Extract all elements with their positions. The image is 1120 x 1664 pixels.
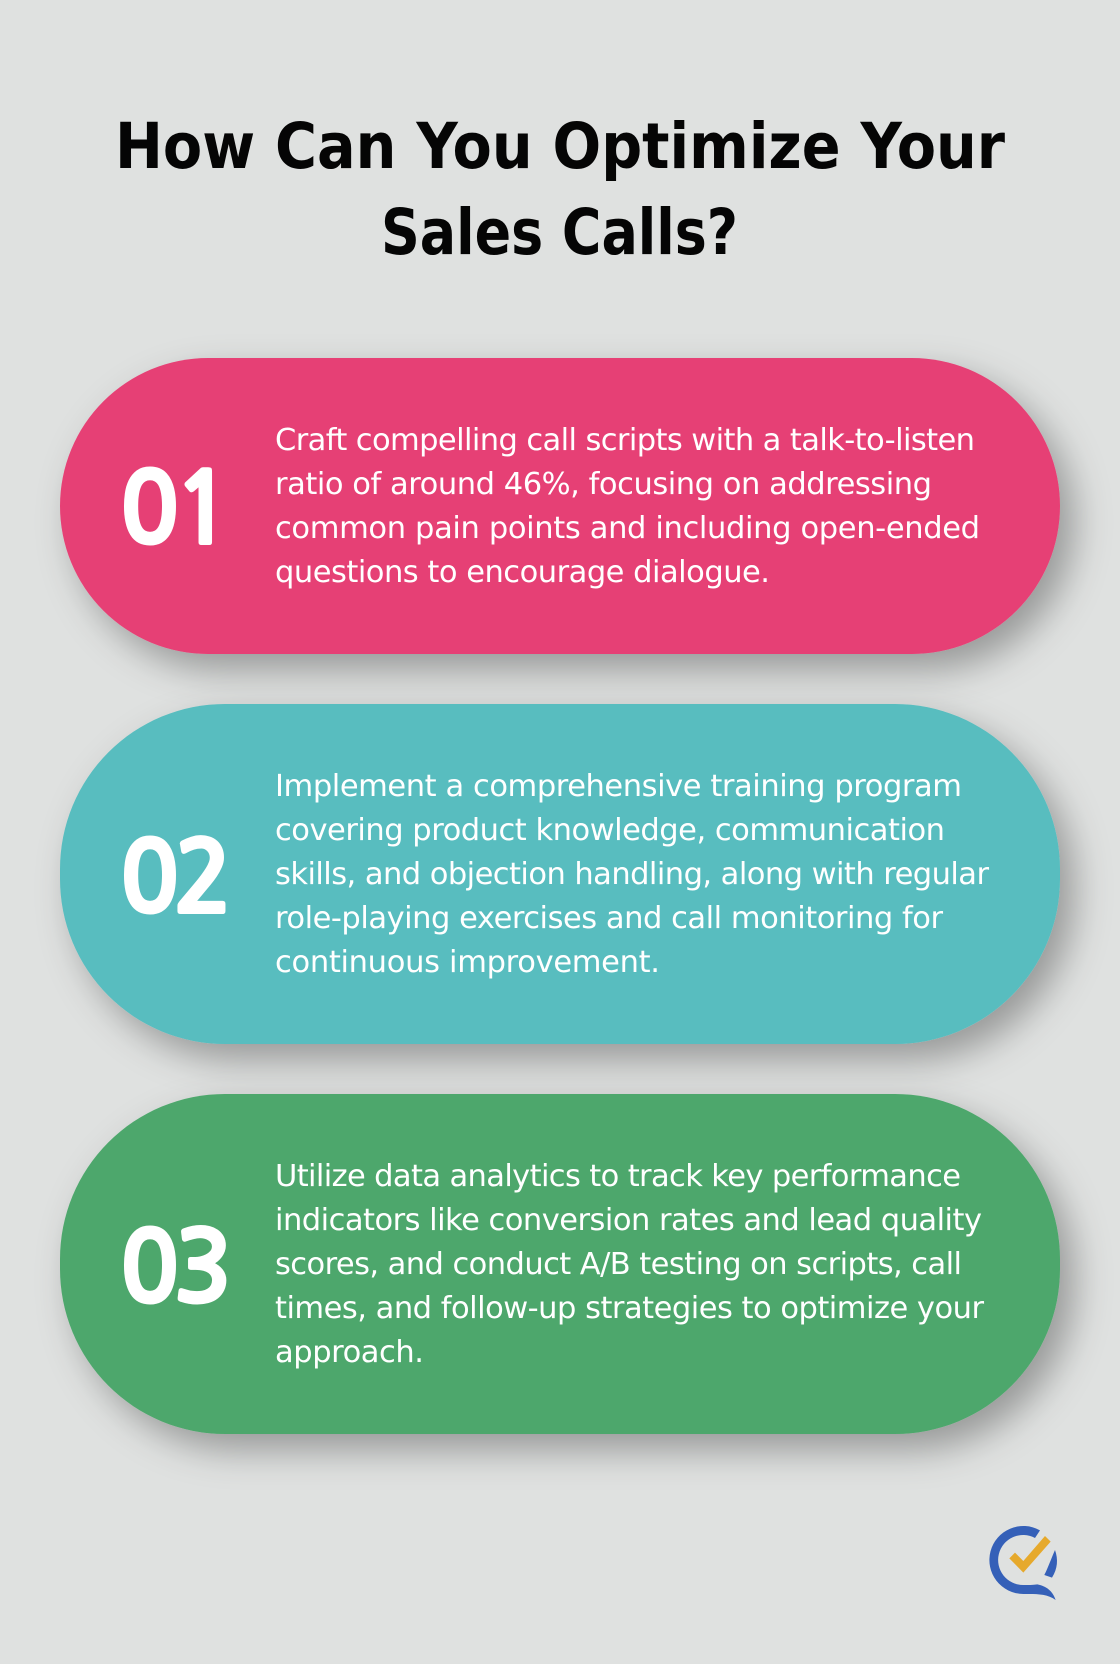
pill background 03 [60,1094,1060,1434]
body text 01: Craft compelling call scripts with a talk-to-listen [275,423,975,458]
body text 01: questions to encourage dialogue. [275,555,770,590]
body text 02: role-playing exercises and call monitoring for [275,901,943,936]
body text 03: scores, and conduct A/B testing on scripts, call [275,1247,962,1282]
body text 03: times, and follow-up strategies to optimize your [275,1291,984,1326]
pill background 01 [60,358,1060,654]
body text 03: indicators like conversion rates and lead quality [275,1203,982,1238]
body text 02: Implement a comprehensive training program [275,769,962,804]
number 02: 02 [120,830,227,927]
pill background 02 [60,704,1060,1044]
body text 01: common pain points and including open-ended [275,511,980,546]
body text 02: continuous improvement. [275,945,660,980]
title: How Can You Optimize Your [115,110,1005,183]
number 03: 03 [120,1220,227,1317]
body text 02: skills, and objection handling, along with regular [275,857,989,892]
body text 03 [275,1159,984,1370]
panel: step 01 [60,358,1060,654]
body text 02: covering product knowledge, communication [275,813,945,848]
body text 02 [275,769,989,980]
body text 01 [275,423,980,590]
body text 01: ratio of around 46%, focusing on addressing [275,467,932,502]
body text 03: approach. [275,1335,424,1370]
number 01: 01 [120,461,227,558]
panel: step 02 [60,704,1060,1044]
panel: step 03 [60,1094,1060,1434]
icon: logo speech bubble with check mark [989,1526,1057,1600]
body text 03: Utilize data analytics to track key performance [275,1159,961,1194]
title [115,110,1005,269]
title: Sales Calls? [381,196,738,269]
